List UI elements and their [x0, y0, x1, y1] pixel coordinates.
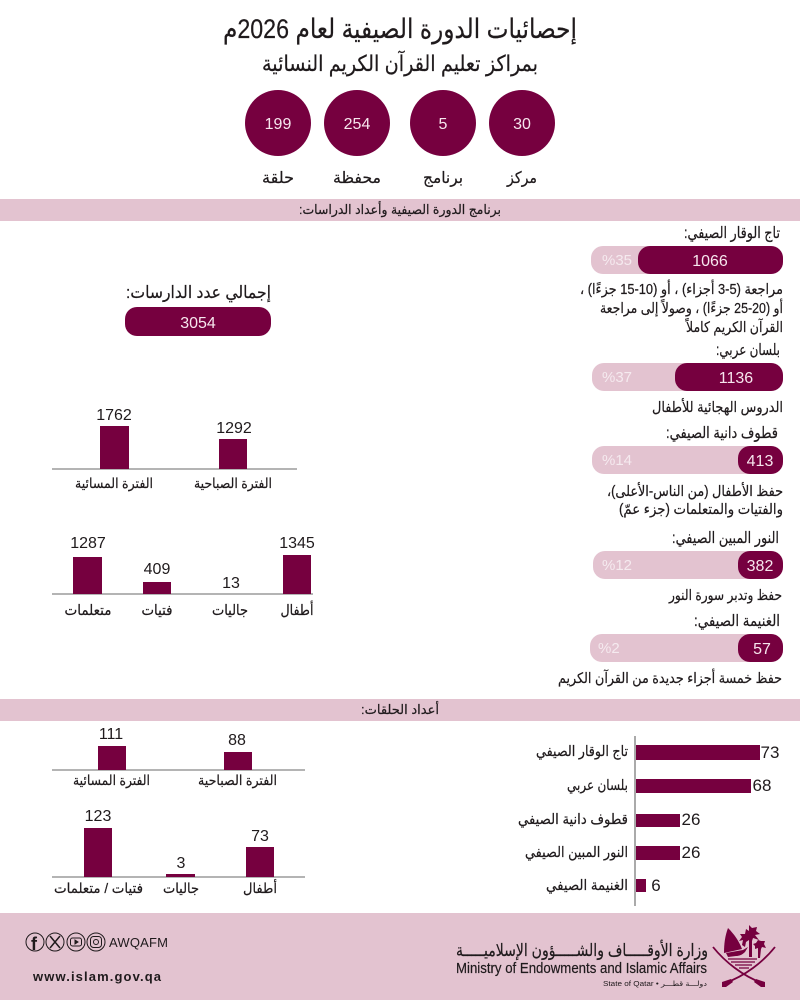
program: Qutuf Daniya: والفتيات والمتعلمات (جزء عمّ) — [619, 502, 783, 518]
horizontal bar chart: circles by program: النور المبين الصيفي — [525, 845, 628, 861]
icon: x — [46, 933, 64, 951]
horizontal bar chart: circles by program: الغنيمة الصيفي — [546, 878, 628, 894]
icon: facebook — [26, 933, 44, 954]
logo: Qatar emblem — [713, 925, 775, 987]
program: Al-Ghanima: %2 — [598, 640, 620, 657]
icon: youtube — [67, 933, 85, 951]
boat hull — [726, 947, 748, 957]
program: Qutuf Daniya — [592, 425, 783, 518]
program: Qutuf Daniya: 413 — [747, 453, 773, 470]
horizontal bar chart: circles by program: 73 — [761, 743, 779, 762]
program: Taj Al-Waqar: 1066 — [692, 253, 728, 270]
section band: programs: برنامج الدورة الصيفية وأعداد الدراسات: — [299, 201, 501, 218]
bar chart: circles by category: 123 — [85, 808, 111, 825]
stat: centers: 30 — [513, 116, 531, 133]
program: Al-Ghanima — [558, 613, 783, 687]
handle: AWQAFM — [109, 935, 168, 950]
bar chart: circles by category: جاليات — [163, 880, 199, 896]
ministry name — [456, 940, 708, 988]
program: Qutuf Daniya: قطوف دانية الصيفي: — [666, 425, 778, 443]
bar chart: students by category: 1345 — [279, 535, 315, 552]
bar chart: circles by category: 73 — [251, 828, 269, 845]
large palm — [739, 925, 760, 957]
bar chart: circles by category: أطفال — [243, 879, 277, 896]
icon: instagram — [87, 933, 105, 951]
icon: facebook: f — [31, 934, 38, 954]
ministry name: Ministry of Endowments and Islamic Affairs — [456, 960, 707, 977]
horizontal bar chart: circles by program: بلسان عربي — [567, 778, 628, 794]
bar chart: students by category: فتيات — [142, 603, 172, 619]
sword handles — [722, 979, 765, 987]
stat: circles: حلقة — [262, 170, 294, 187]
ministry name: وزارة الأوقـــــاف والشـــــؤون الإسلاميـــــة — [456, 940, 708, 960]
program: Taj Al-Waqar: أو (20-25 جزءًا) ، وصولاً إلى مراجعة — [600, 298, 783, 317]
sail — [724, 928, 742, 953]
small palm — [753, 940, 766, 958]
bar chart: students by category — [52, 535, 315, 619]
bar chart: circles by category: فتيات / متعلمات — [54, 880, 143, 896]
program: Belisan Arabi — [592, 342, 783, 416]
bar chart: students by period — [52, 407, 297, 492]
program: Qutuf Daniya: %14 — [602, 452, 632, 469]
bar chart: students by period: 1762 — [96, 407, 132, 424]
bar chart: circles by period: الفترة الصباحية — [198, 773, 277, 789]
title: إحصائيات الدورة الصيفية لعام 2026م — [223, 14, 577, 45]
stat: centers: مركز — [506, 170, 537, 188]
total students: 3054 — [180, 315, 216, 332]
section band: circles: أعداد الحلقات: — [361, 701, 439, 717]
horizontal bar chart: circles by program: 6 — [651, 876, 661, 895]
bar chart: students by category: أطفال — [280, 600, 314, 619]
ministry name: State of Qatar • دولـــة قطـــر — [603, 981, 707, 988]
section band: circles — [0, 699, 800, 721]
stat: memorizers — [324, 90, 390, 187]
bar chart: students by period: 1292 — [216, 420, 252, 437]
crossed swords — [713, 947, 775, 983]
program: Taj Al-Waqar: تاج الوقار الصيفي: — [684, 225, 780, 243]
horizontal bar chart: circles by program: قطوف دانية الصيفي — [518, 812, 628, 828]
bar chart: circles by period: 111 — [99, 726, 123, 743]
bar chart: circles by period: 88 — [228, 732, 246, 749]
section band: programs — [0, 199, 800, 221]
bar chart: circles by period: الفترة المسائية — [73, 773, 150, 789]
program: Al-Ghanima: الغنيمة الصيفي: — [694, 613, 780, 631]
program: Belisan Arabi: الدروس الهجائية للأطفال — [652, 398, 783, 416]
bar chart: students by category: 409 — [144, 561, 170, 578]
waves — [728, 959, 757, 968]
bar chart: students by period: الفترة المسائية — [75, 476, 153, 492]
program: Taj Al-Waqar: %35 — [602, 252, 632, 269]
horizontal bar chart: circles by program: 26 — [682, 810, 700, 829]
horizontal bar chart: circles by program — [518, 736, 779, 906]
stat: centers — [489, 90, 555, 188]
stat: programs: برنامج — [423, 170, 463, 188]
total students: إجمالي عدد الدارسات: — [126, 283, 271, 303]
stat: programs: 5 — [439, 116, 448, 133]
horizontal bar chart: circles by program: 26 — [682, 843, 700, 862]
program: Taj Al-Waqar — [580, 225, 783, 336]
subtitle: بمراكز تعليم القرآن الكريم النسائية — [262, 50, 538, 77]
total students — [125, 283, 271, 336]
bar chart: circles by period — [52, 726, 305, 789]
website: www.islam.gov.qa — [32, 969, 162, 984]
program: Al-Ghanima: 57 — [753, 641, 771, 658]
stat: programs — [410, 90, 476, 188]
horizontal bar chart: circles by program: 68 — [753, 776, 771, 795]
program: Belisan Arabi: 1136 — [719, 370, 753, 387]
program: Taj Al-Waqar: مراجعة (5-3 أجزاء) ، أو (10-15 جزءًا) ، — [580, 279, 783, 298]
program: Belisan Arabi: بلسان عربي: — [716, 342, 780, 360]
bar chart: circles by category: 3 — [177, 855, 186, 872]
program: Al-Nour Al-Mubin: حفظ وتدبر سورة النور — [668, 588, 782, 604]
social icons and handle — [26, 933, 168, 954]
program: Al-Nour Al-Mubin: النور المبين الصيفي: — [672, 530, 779, 548]
program: Taj Al-Waqar: القرآن الكريم كاملاً — [685, 318, 783, 336]
program: Belisan Arabi: %37 — [602, 369, 632, 386]
bar chart: students by category: متعلمات — [64, 603, 112, 619]
bar chart: students by period: الفترة الصباحية — [194, 476, 272, 492]
bar chart: circles by category — [52, 808, 305, 896]
bar chart: students by category: 13 — [222, 575, 240, 592]
bar chart: students by category: 1287 — [70, 535, 106, 552]
stat circles — [245, 90, 555, 188]
stat: circles: 199 — [265, 116, 291, 133]
program: Al-Nour Al-Mubin: %12 — [602, 557, 632, 574]
horizontal bar chart: circles by program: تاج الوقار الصيفي — [536, 744, 628, 761]
program: Al-Nour Al-Mubin — [593, 530, 783, 604]
footer band — [0, 913, 800, 1000]
program: Al-Nour Al-Mubin: 382 — [747, 558, 773, 575]
stat: memorizers: 254 — [344, 116, 370, 133]
bar chart: students by category: جاليات — [212, 603, 248, 619]
stat: memorizers: محفظة — [333, 170, 381, 187]
stat: circles — [245, 90, 311, 187]
